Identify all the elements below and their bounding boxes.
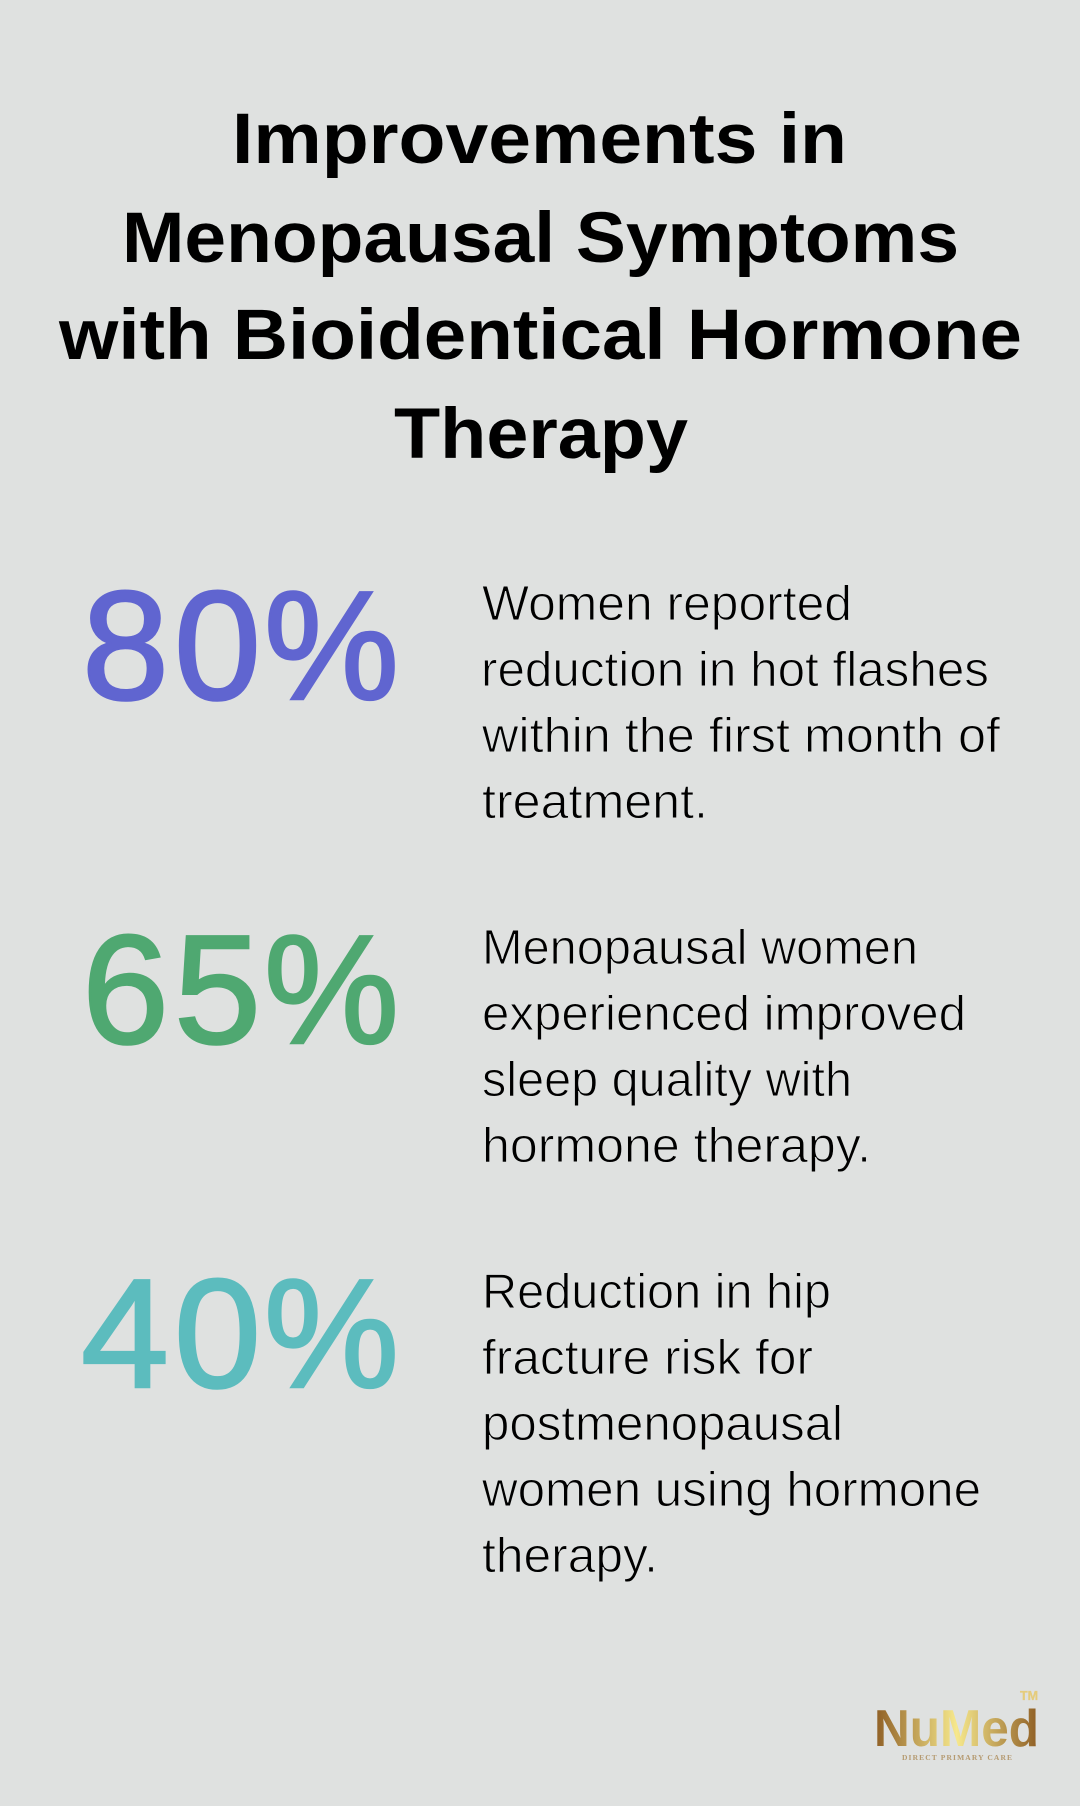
logo: NuMed: NuMed [874,1700,1039,1758]
stat number: 65%: 5 [174,903,261,1076]
description: hot flashes: within the first month of [481,709,1000,763]
stat number: 65%: % [264,903,399,1076]
description: hot flashes [481,577,1000,829]
title: Menopausal Symptoms [122,199,959,278]
description: hip fracture: women using hormone [481,1463,981,1517]
description: hot flashes: treatment. [482,775,708,829]
description: sleep quality: Menopausal women [482,921,918,975]
description: hip fracture: Reduction in hip [482,1265,831,1319]
title: Therapy [394,395,689,474]
stat number: 65%: 6 [82,903,169,1076]
description: hip fracture [481,1265,981,1583]
stat number: 65% [82,903,399,1076]
description: sleep quality: sleep quality with [482,1053,852,1107]
description: hip fracture: therapy. [482,1529,658,1583]
stat row: 80% hot flashes [82,559,1000,829]
stat number: 40%: 4 [81,1247,169,1420]
title [58,100,1022,474]
stat row: 40% hip fracture [81,1247,981,1583]
description: hip fracture: fracture risk for [482,1331,813,1385]
description: hot flashes: reduction in hot flashes [481,643,989,697]
stat number: 40%: 0 [174,1247,261,1420]
stat row: 65% sleep quality [82,903,966,1173]
description: sleep quality [482,921,966,1173]
stat number: 40%: % [264,1247,399,1420]
title: with Bioidentical Hormone [58,296,1022,375]
stat number: 40% [81,1247,399,1420]
stat number: 80%: 8 [82,559,169,732]
stat number: 80%: % [264,559,399,732]
stat number: 80% [82,559,399,732]
logo: NuMed: TM [1020,1689,1038,1703]
title: Improvements in [232,100,847,179]
description: sleep quality: hormone therapy. [482,1119,871,1173]
logo: NuMed: DIRECT PRIMARY CARE [902,1753,1012,1762]
description: hip fracture: postmenopausal [482,1397,843,1451]
description: sleep quality: experienced improved [482,987,966,1041]
description: hot flashes: Women reported [482,577,852,631]
stat number: 80%: 0 [174,559,261,732]
